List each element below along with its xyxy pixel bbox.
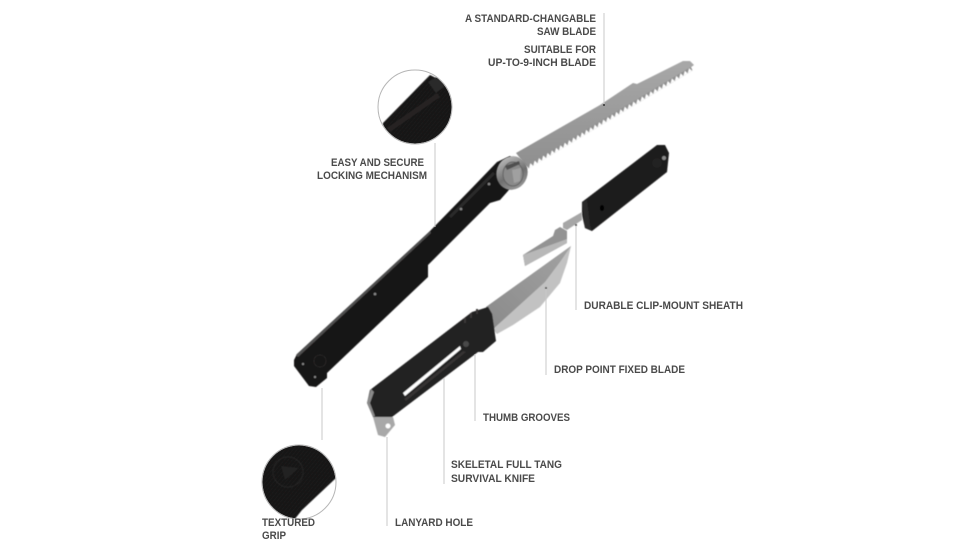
leader: skeletal tang	[443, 378, 445, 484]
label: saw blade: UP-TO-9-INCH BLADE	[488, 57, 596, 69]
leader: lanyard	[386, 437, 388, 526]
knife handle	[367, 307, 496, 437]
leader: drop point	[545, 289, 547, 375]
belt clip	[523, 212, 582, 266]
label: sheath: DURABLE CLIP-MOUNT SHEATH	[584, 300, 743, 312]
handle screws	[302, 183, 490, 378]
detail circle: locking mechanism	[378, 70, 452, 144]
label: skeletal tang: SURVIVAL KNIFE	[451, 473, 535, 485]
label: saw blade	[465, 13, 596, 69]
detail circle: textured grip	[262, 444, 336, 520]
grip logo	[314, 355, 326, 367]
label: skeletal tang	[451, 459, 562, 485]
leader: saw blade	[603, 13, 605, 106]
folding saw handle	[294, 156, 522, 387]
label: fixed blade: DROP POINT FIXED BLADE	[554, 364, 685, 376]
label: saw blade: SUITABLE FOR	[524, 44, 596, 56]
label: locking mechanism: LOCKING MECHANISM	[317, 170, 427, 182]
saw teeth	[526, 67, 693, 169]
leader: locking	[434, 143, 436, 227]
infographic canvas	[262, 13, 742, 539]
pivot lock	[492, 152, 532, 194]
sheath	[582, 145, 669, 231]
label: textured grip: GRIP	[262, 530, 286, 542]
label: locking mechanism: EASY AND SECURE	[331, 157, 424, 169]
label: textured grip: TEXTURED	[262, 517, 315, 529]
saw blade	[516, 61, 694, 169]
leader: sheath	[575, 226, 577, 310]
label: thumb grooves: THUMB GROOVES	[483, 412, 570, 424]
clip strip	[563, 212, 582, 230]
lanyard tab	[373, 417, 395, 437]
label: saw blade: A STANDARD-CHANGABLE	[465, 13, 596, 25]
leader: textured grip	[321, 388, 323, 440]
fixed blade	[486, 246, 571, 334]
label: locking mechanism	[317, 157, 427, 182]
label: skeletal tang: SKELETAL FULL TANG	[451, 459, 562, 471]
label: saw blade: SAW BLADE	[537, 26, 596, 38]
leader: thumb grooves	[474, 354, 476, 421]
clip body	[523, 227, 567, 266]
thumb grooves	[464, 309, 478, 323]
skeletal slot	[403, 346, 461, 396]
label: textured grip	[262, 517, 315, 542]
label: lanyard hole: LANYARD HOLE	[395, 517, 473, 529]
